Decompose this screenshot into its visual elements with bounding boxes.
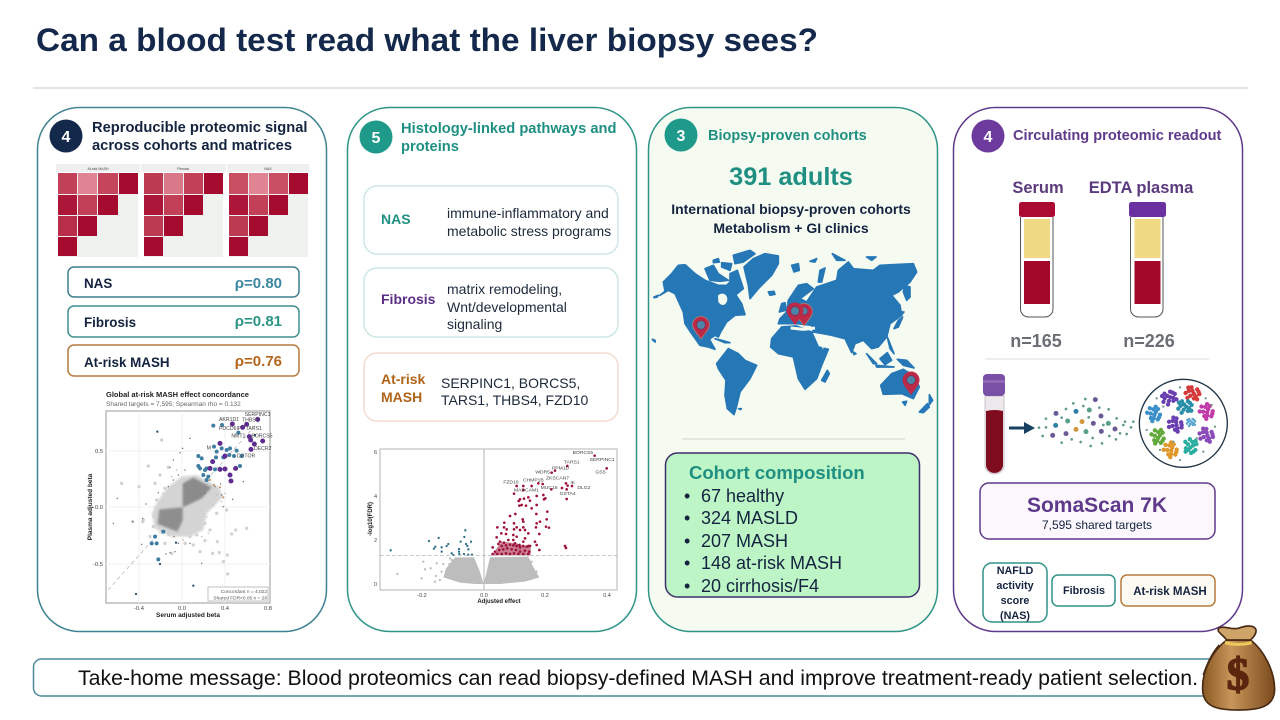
volcano plot: GSTA4 <box>560 491 576 497</box>
volcano plot: TARS1 <box>564 459 580 465</box>
scatter chart: at-risk MASH effect concordance: BORCS5 <box>251 434 273 440</box>
tube: EDTA plasma: n=226 <box>1123 331 1175 351</box>
volcano plot: DLG2 <box>577 485 591 491</box>
tube: serum: Serum <box>1012 179 1064 197</box>
heading: histology: proteins <box>401 139 459 155</box>
heatmap: fibrosis <box>141 164 226 257</box>
rho card: fibrosis: Fibrosis <box>84 315 136 330</box>
scatter chart: at-risk MASH effect concordance: 0.5 <box>95 449 103 455</box>
scatter chart: at-risk MASH effect concordance: Plasma adjusted beta <box>87 473 94 540</box>
card: fibrosis: signaling <box>447 316 502 332</box>
cohort composition box: • <box>684 531 690 551</box>
tube: serum: n=165 <box>1010 331 1062 351</box>
badge: 3: 3 <box>677 128 686 145</box>
icon: blood collection tube <box>983 374 1005 474</box>
protein dispersal dots <box>1039 399 1133 446</box>
take-home message bar: Take-home message: Blood proteomics can read biopsy-defined MASH and improve treatment-ready patient selection. <box>78 667 1198 690</box>
volcano plot: -log10(FDR) <box>368 502 374 536</box>
panel: reproducible proteomic signal <box>38 108 326 632</box>
legend box: Shared FDR<0.05 n = 28 <box>213 596 267 602</box>
card: at-risk MASH: SERPINC1, BORCS5, <box>441 375 580 391</box>
arrow <box>1009 422 1035 434</box>
card: NAS: NAS <box>381 211 411 227</box>
volcano plot: 2 <box>374 538 377 544</box>
volcano plot: IK <box>570 480 576 486</box>
panel: circulating proteomic readout <box>954 108 1242 632</box>
volcano plot: 0.0 <box>480 593 488 599</box>
icon: money bag: $ <box>1227 649 1249 699</box>
heatmap: NAS: NAS <box>264 167 272 171</box>
tube: EDTA plasma: EDTA plasma <box>1089 179 1194 197</box>
volcano plot <box>368 449 617 605</box>
cohort composition box: 207 MASH <box>701 531 788 551</box>
volcano plot: MADCAM1 <box>514 487 539 493</box>
chip: NAS: (NAS) <box>1000 610 1030 622</box>
heatmap: fibrosis: Fibrosis <box>177 167 189 171</box>
chip: NAS: NAFLD <box>997 565 1033 577</box>
scatter chart: at-risk MASH effect concordance: 0.8 <box>264 606 272 612</box>
scatter chart: at-risk MASH effect concordance: THBS4 <box>242 418 259 424</box>
scatter chart: at-risk MASH effect concordance: NMT1 <box>231 434 246 440</box>
volcano plot: ZKSCAN7 <box>546 475 569 481</box>
tube: serum <box>1010 179 1064 351</box>
legend box <box>208 587 268 602</box>
cohort composition box: • <box>684 486 690 506</box>
SomaScan card: SomaScan 7K <box>1027 494 1167 517</box>
scatter chart: at-risk MASH effect concordance: Shared targets = 7,595; Spearman rho = 0.132 <box>106 401 241 408</box>
world map <box>652 250 933 415</box>
heatmap: NAS <box>227 164 309 257</box>
chip: fibrosis <box>1052 575 1115 606</box>
heading: readout: Circulating proteomic readout <box>1013 128 1222 144</box>
chip: NAS: activity <box>996 580 1034 592</box>
rho card: NAS: NAS <box>84 276 112 291</box>
chip: fibrosis: Fibrosis <box>1063 585 1105 597</box>
card: NAS: immune-inflammatory and <box>447 205 609 221</box>
take-home message bar <box>34 659 1228 696</box>
volcano plot: GSS <box>595 470 607 476</box>
cohort composition box: • <box>684 576 690 596</box>
rho card: NAS <box>68 267 299 297</box>
rho card: fibrosis <box>68 306 299 337</box>
cohort composition box: 67 healthy <box>701 486 784 506</box>
subtitle: Metabolism + GI clinics <box>713 220 869 236</box>
rho card: at-risk MASH: At-risk MASH <box>84 355 170 370</box>
rho card: at-risk MASH: ρ=0.76 <box>235 353 282 370</box>
scatter chart: at-risk MASH effect concordance: SERPINC1 <box>245 412 271 418</box>
cohort composition box: 324 MASLD <box>701 508 798 528</box>
heatmap: at-risk MASH <box>56 164 140 257</box>
scatter chart: at-risk MASH effect concordance: COTOR <box>237 453 255 459</box>
rho card: fibrosis: ρ=0.81 <box>235 313 282 330</box>
map pin: Australia <box>902 372 920 395</box>
panel: biopsy-proven cohorts <box>648 108 938 632</box>
icon: money bag <box>1203 626 1275 710</box>
scatter chart: at-risk MASH effect concordance: Serum adjusted beta <box>156 612 220 619</box>
title: Can a blood test read what the liver biopsy sees? <box>36 22 818 58</box>
scatter chart: at-risk MASH effect concordance: 0.0 <box>95 505 103 511</box>
badge: 4 <box>50 120 82 152</box>
volcano plot: 0.2 <box>541 593 549 599</box>
card: fibrosis: Wnt/developmental <box>447 299 567 315</box>
scatter chart: at-risk MASH effect concordance: M <box>207 446 211 452</box>
cohort composition box: Cohort composition <box>689 462 865 483</box>
card: at-risk MASH <box>364 353 618 421</box>
map pin: Mexico <box>692 316 710 339</box>
volcano plot: PPM1D <box>552 465 570 471</box>
chip: at-risk MASH <box>1121 575 1215 606</box>
scatter chart: at-risk MASH effect concordance: 0.4 <box>221 606 230 612</box>
protein cluster magnifier <box>1139 379 1227 467</box>
badge: 4: 4 <box>984 129 993 146</box>
cohort composition box: 20 cirrhosis/F4 <box>701 576 819 596</box>
card: fibrosis: Fibrosis <box>381 291 436 307</box>
SomaScan card: 7,595 shared targets <box>1042 518 1152 532</box>
heading: histology: Histology-linked pathways and <box>401 121 616 137</box>
volcano plot: MUC16 <box>541 485 558 491</box>
scatter chart: at-risk MASH effect concordance: -0.4 <box>134 606 145 612</box>
scatter chart: at-risk MASH effect concordance: PDCD6IP <box>219 426 242 432</box>
map pin: Europe east <box>796 304 812 326</box>
heading: cohorts: Biopsy-proven cohorts <box>708 128 867 144</box>
legend box: Concordant n = 4,022 <box>221 589 267 595</box>
volcano plot: 4 <box>374 494 377 500</box>
volcano plot: -0.2 <box>417 593 427 599</box>
card: at-risk MASH: At-risk <box>381 371 426 387</box>
volcano plot: CHMP1B <box>523 478 544 484</box>
volcano plot: SERPINC1 <box>590 457 615 463</box>
badge: 5 <box>360 120 392 154</box>
rho card: at-risk MASH <box>68 345 299 376</box>
card: NAS <box>364 186 618 254</box>
badge: 3 <box>664 118 698 152</box>
panel: histology-linked pathways <box>348 108 636 632</box>
card: at-risk MASH: TARS1, THBS4, FZD10 <box>441 392 589 408</box>
badge: 5: 5 <box>372 130 381 147</box>
badge: 4: 4 <box>62 129 71 146</box>
scatter chart: at-risk MASH effect concordance: Global at-risk MASH effect concordance <box>106 390 249 399</box>
chip: at-risk MASH: At-risk MASH <box>1133 586 1207 598</box>
tube: EDTA plasma <box>1089 179 1194 351</box>
scatter chart: at-risk MASH effect concordance: TARS1 <box>246 426 262 432</box>
card: fibrosis: matrix remodeling, <box>447 281 562 297</box>
heading: reproducible signal: Reproducible proteomic signal <box>92 120 307 136</box>
cohort composition box <box>666 453 920 597</box>
cohort composition box: • <box>684 553 690 573</box>
scatter chart: at-risk MASH effect concordance: DECR2 <box>254 446 272 452</box>
stat: 391 adults: 391 adults <box>729 163 853 191</box>
cohort composition box: 148 at-risk MASH <box>701 553 842 573</box>
volcano plot: 0 <box>374 582 377 588</box>
chip: NAS <box>983 563 1047 622</box>
volcano plot: WDR5 <box>535 469 550 475</box>
cohort composition box: • <box>684 508 690 528</box>
scatter chart: at-risk MASH effect concordance <box>87 390 273 619</box>
volcano plot: BORCS5 <box>573 450 593 456</box>
volcano plot: 0.4 <box>603 593 611 599</box>
volcano plot: FZD10 <box>503 480 519 486</box>
scatter chart: at-risk MASH effect concordance: -0.5 <box>93 562 103 568</box>
volcano plot: 6 <box>374 450 377 456</box>
SomaScan card <box>980 483 1215 539</box>
card: fibrosis <box>364 268 618 337</box>
scatter chart: at-risk MASH effect concordance: AKR1D1 <box>219 417 239 423</box>
scatter chart: at-risk MASH effect concordance: 0.0 <box>178 606 186 612</box>
badge: 4 <box>972 120 1004 152</box>
subtitle: International biopsy-proven cohorts <box>671 201 911 217</box>
heatmap: at-risk MASH: At-risk MASH <box>88 167 109 171</box>
heading: reproducible signal: across cohorts and matrices <box>92 138 292 154</box>
chip: NAS: score <box>1001 595 1029 607</box>
volcano plot: Adjusted effect <box>477 599 521 605</box>
card: at-risk MASH: MASH <box>381 389 422 405</box>
map pin: Europe west <box>786 302 804 325</box>
rho card: NAS: ρ=0.80 <box>235 275 282 292</box>
card: NAS: metabolic stress programs <box>447 223 611 239</box>
